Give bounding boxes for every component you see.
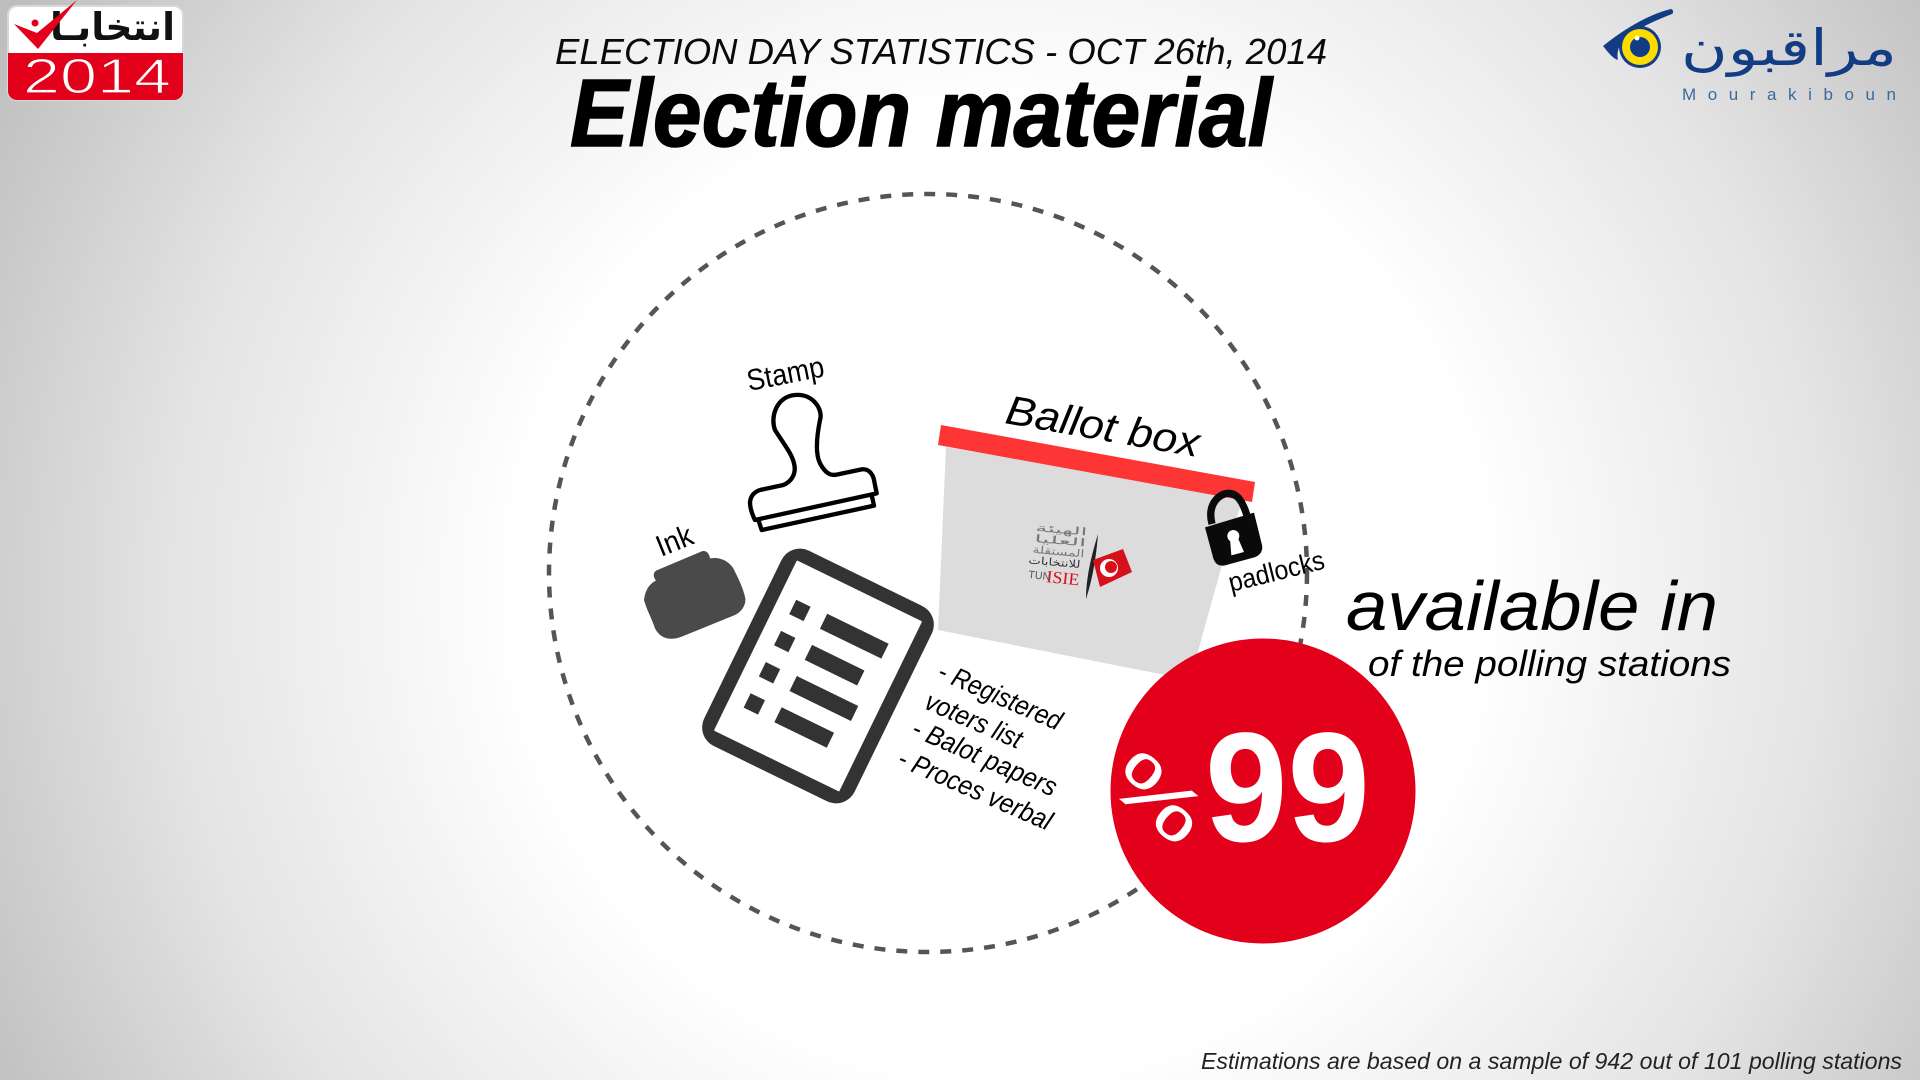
ballot box — [938, 425, 1255, 680]
icon: padlock — [1205, 493, 1262, 566]
padlocks label: padlocks — [1225, 545, 1328, 598]
ballot box label: Ballot box — [1002, 387, 1205, 466]
materials list — [894, 656, 1067, 837]
box lid — [938, 425, 1255, 502]
stamp label: Stamp — [744, 351, 827, 398]
materials list: voters list — [921, 686, 1028, 755]
footnote: Estimations are based on a sample of 942 out of 101 polling stations — [1201, 1048, 1903, 1074]
dashed circle — [549, 194, 1307, 952]
logo: Intikhabat 2014 — [8, 0, 183, 104]
ISIE logo: للانتخابات — [1028, 555, 1081, 571]
ISIE logo: الهيئة — [1035, 522, 1088, 538]
title: Election material — [570, 60, 1274, 167]
icon: ink bottle — [644, 551, 745, 639]
ISIE logo: المستقلة — [1032, 544, 1085, 560]
logo: Intikhabat 2014: انتخابـا — [50, 5, 175, 49]
logo: Intikhabat 2014: 2014 — [23, 50, 171, 104]
polling stations text: of the polling stations — [1368, 643, 1731, 684]
ISIE logo — [1028, 522, 1132, 599]
available in heading: available in — [1346, 567, 1718, 645]
logo: Mourakiboun — [1603, 9, 1897, 104]
icon: stamp — [750, 395, 877, 530]
logo: Mourakiboun: مراقبون — [1681, 19, 1897, 77]
ISIE logo: العليا — [1034, 533, 1087, 549]
box body — [938, 447, 1243, 680]
icon: eye — [1603, 9, 1673, 68]
logo: Mourakiboun: Mourakiboun — [1682, 85, 1896, 104]
icon: clipboard checklist — [695, 542, 941, 810]
percentage badge: 99 — [1205, 701, 1370, 875]
ISIE logo: TUN — [1028, 569, 1051, 583]
materials list: - Proces verbal — [894, 743, 1058, 837]
stamp and ink and list icons — [644, 395, 941, 810]
materials list: - Registered — [934, 656, 1067, 736]
ink label: Ink — [651, 519, 699, 563]
percentage badge — [1093, 638, 1416, 944]
ISIE logo: ISIE — [1046, 567, 1080, 589]
subtitle: ELECTION DAY STATISTICS - OCT 26th, 2014 — [555, 31, 1327, 72]
materials list: - Balot papers — [908, 713, 1062, 802]
percentage badge: % — [1093, 733, 1224, 863]
